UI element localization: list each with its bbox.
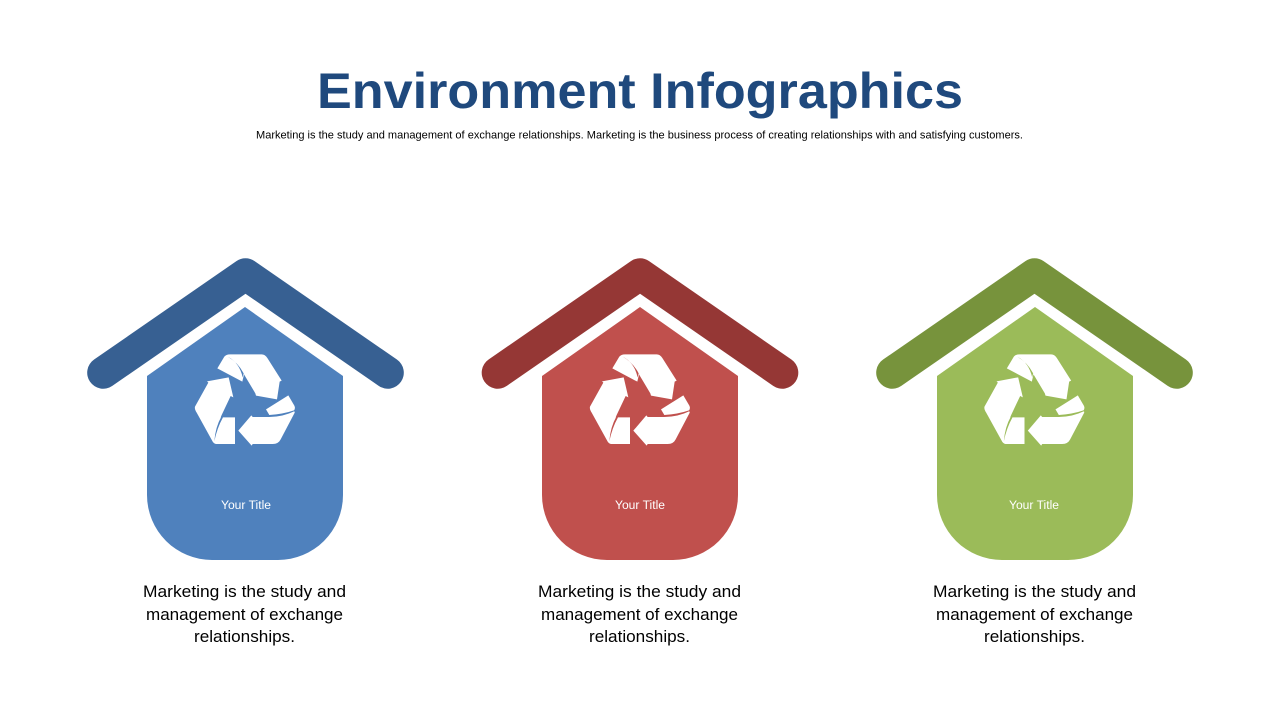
text block: blue description bbox=[143, 582, 346, 646]
text block: green description: relationships. bbox=[984, 627, 1085, 646]
house body: blue bbox=[147, 307, 343, 560]
text block: red description: Marketing is the study and bbox=[538, 582, 741, 601]
icon: recycle red bbox=[590, 354, 690, 446]
house body: green bbox=[937, 307, 1133, 560]
text block: green description: management of exchange bbox=[936, 605, 1133, 624]
text block: blue description: relationships. bbox=[194, 627, 295, 646]
label: green house title: Your Title bbox=[1009, 500, 1059, 512]
text block: blue description: management of exchange bbox=[146, 605, 343, 624]
roof: green bbox=[892, 274, 1177, 373]
roof: blue bbox=[103, 274, 388, 373]
text block: red description: relationships. bbox=[589, 627, 690, 646]
text block: red description: management of exchange bbox=[541, 605, 738, 624]
text block: green description bbox=[933, 582, 1136, 646]
text block: blue description: Marketing is the study and bbox=[143, 582, 346, 601]
panel: blue house bbox=[103, 274, 388, 646]
subtitle: Marketing is the study and management of exchange relationships. Marketing is the business process of creating relationships with and satisfying customers. bbox=[256, 130, 1023, 142]
title: Environment Infographics bbox=[317, 63, 963, 119]
roof: red bbox=[498, 274, 782, 373]
label: blue house title: Your Title bbox=[221, 500, 271, 512]
icon: recycle green bbox=[984, 354, 1084, 446]
panel: red house bbox=[498, 274, 782, 646]
panel: green house bbox=[892, 274, 1177, 646]
text block: green description: Marketing is the study and bbox=[933, 582, 1136, 601]
label: red house title: Your Title bbox=[615, 500, 665, 512]
house body: red bbox=[542, 307, 738, 560]
icon: recycle blue bbox=[195, 354, 295, 446]
text block: red description bbox=[538, 582, 741, 646]
